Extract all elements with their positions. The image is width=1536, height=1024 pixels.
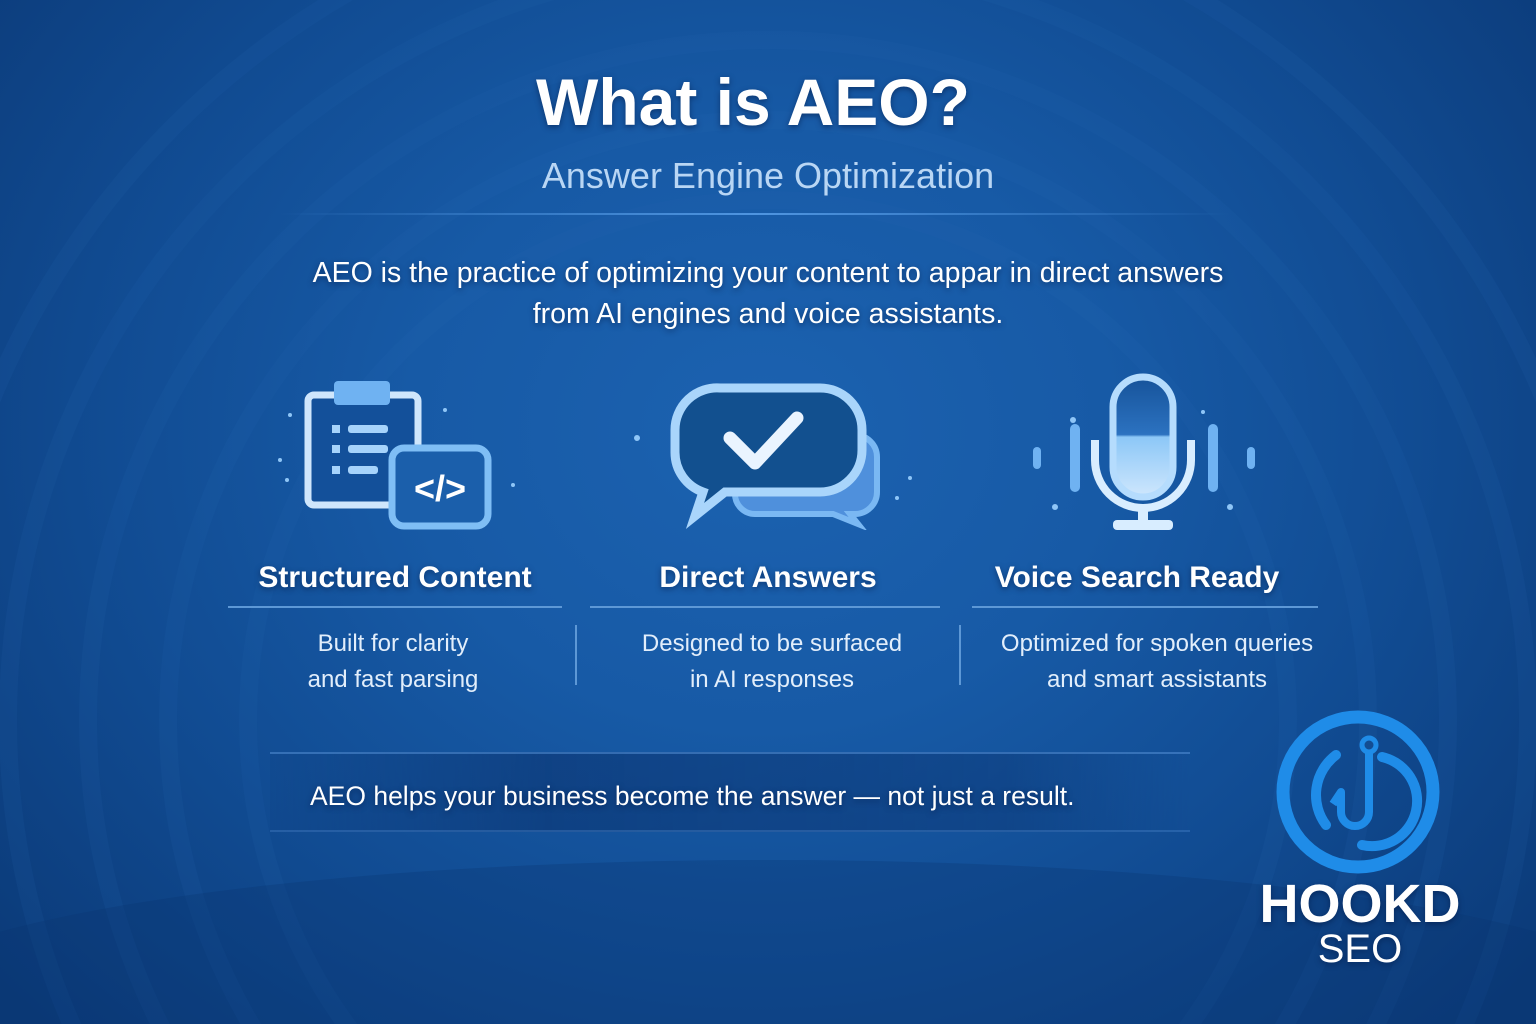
subtitle: Answer Engine Optimization (542, 155, 994, 196)
text: direct answers desc: in AI responses (690, 666, 854, 693)
intro paragraph: AEO is the practice of optimizing your content to appar in direct answers (313, 257, 1223, 289)
heading: voice search ready: Voice Search Ready (995, 561, 1279, 594)
text: structured content desc (308, 630, 478, 693)
text: voice search desc (1001, 630, 1313, 693)
text: voice search desc: Optimized for spoken queries (1001, 630, 1313, 657)
icon: clipboard with code: </> (414, 468, 466, 509)
banner: tagline (270, 752, 1190, 832)
banner: tagline: AEO helps your business become the answer — not just a result. (310, 781, 1074, 811)
title: What is AEO? (536, 65, 970, 139)
logo: hookd seo: HOOKD (1260, 874, 1460, 934)
intro paragraph (312, 257, 1224, 334)
text: direct answers desc: Designed to be surfaced (642, 630, 902, 657)
text: direct answers desc (642, 630, 902, 693)
heading: structured content: Structured Content (258, 561, 532, 594)
text: structured content desc: and fast parsing (308, 666, 478, 693)
logo: hookd seo (1260, 710, 1460, 971)
intro paragraph: from AI engines and voice assistants. (533, 298, 1003, 330)
icon: chat check (634, 383, 912, 530)
icon: clipboard with code (278, 381, 515, 530)
text: voice search desc: and smart assistants (1047, 666, 1267, 693)
icon: microphone (1033, 374, 1255, 530)
text: structured content desc: Built for clarity (318, 630, 468, 657)
logo: hookd seo: SEO (1318, 927, 1402, 971)
heading: direct answers: Direct Answers (659, 561, 877, 594)
